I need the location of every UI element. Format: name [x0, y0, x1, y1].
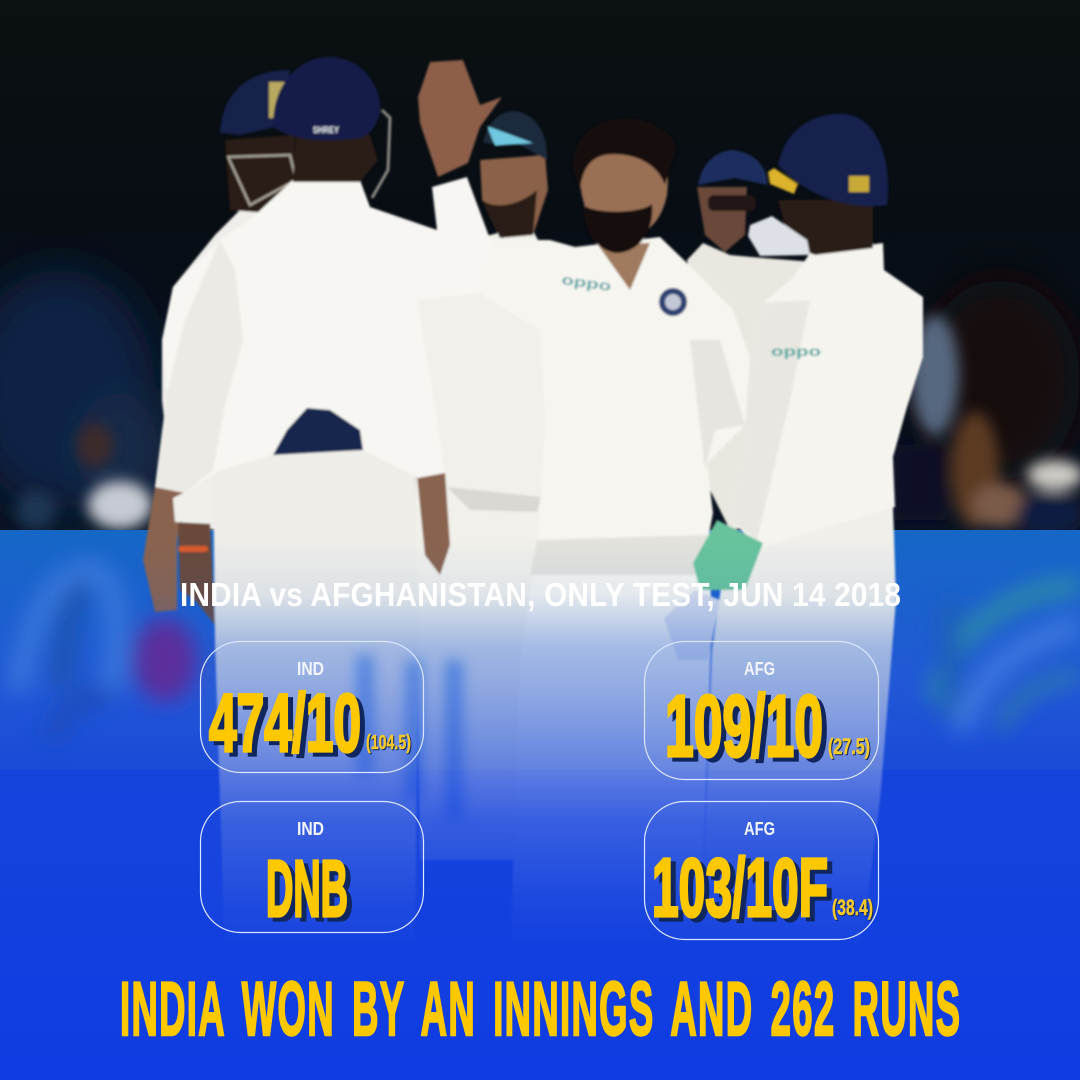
player: wicketkeeper right: oppo — [771, 343, 821, 359]
background: dark stadium crowd — [0, 0, 1080, 540]
team label: IND: IND — [297, 659, 324, 679]
score: 474/10: 474/10 — [209, 678, 361, 769]
result headline: INDIA WON BY AN INNINGS AND 262 RUNS — [120, 966, 960, 1052]
overs: 27.5: (27.5) — [828, 734, 870, 759]
player: Jadeja centre — [512, 118, 750, 910]
player: centre with sunglasses — [415, 111, 570, 860]
background: blue advertising banner — [0, 530, 1080, 1080]
overs: 104.5: (104.5) — [366, 732, 411, 754]
player: behind right — [687, 150, 815, 530]
player: foreground back view high five: SHREY — [313, 125, 339, 135]
panel: India first innings — [200, 642, 424, 772]
team label: IND: IND — [297, 819, 324, 839]
panel: India second innings: DNB — [266, 844, 348, 933]
player: Jadeja centre: oppo — [561, 271, 612, 294]
panel: India second innings — [200, 802, 424, 933]
score: 103/10F: 103/10F — [652, 841, 828, 934]
panel: Afghanistan first innings — [644, 642, 878, 780]
score: 109/10: 109/10 — [665, 678, 823, 775]
team label: AFG: AFG — [744, 659, 775, 679]
panel: Afghanistan second innings — [644, 802, 878, 940]
player: foreground back view high five — [143, 57, 502, 960]
player: far left behind — [162, 70, 300, 530]
team label: AFG: AFG — [744, 819, 775, 839]
photo: Indian team players celebrating, fading into blue — [143, 57, 923, 960]
heading: match title: INDIA vs AFGHANISTAN, ONLY TEST, JUN 14 2018 — [180, 577, 901, 613]
stumps in background of legs — [357, 655, 462, 820]
player: wicketkeeper right — [664, 114, 923, 960]
overs: 38.4: (38.4) — [832, 895, 873, 920]
